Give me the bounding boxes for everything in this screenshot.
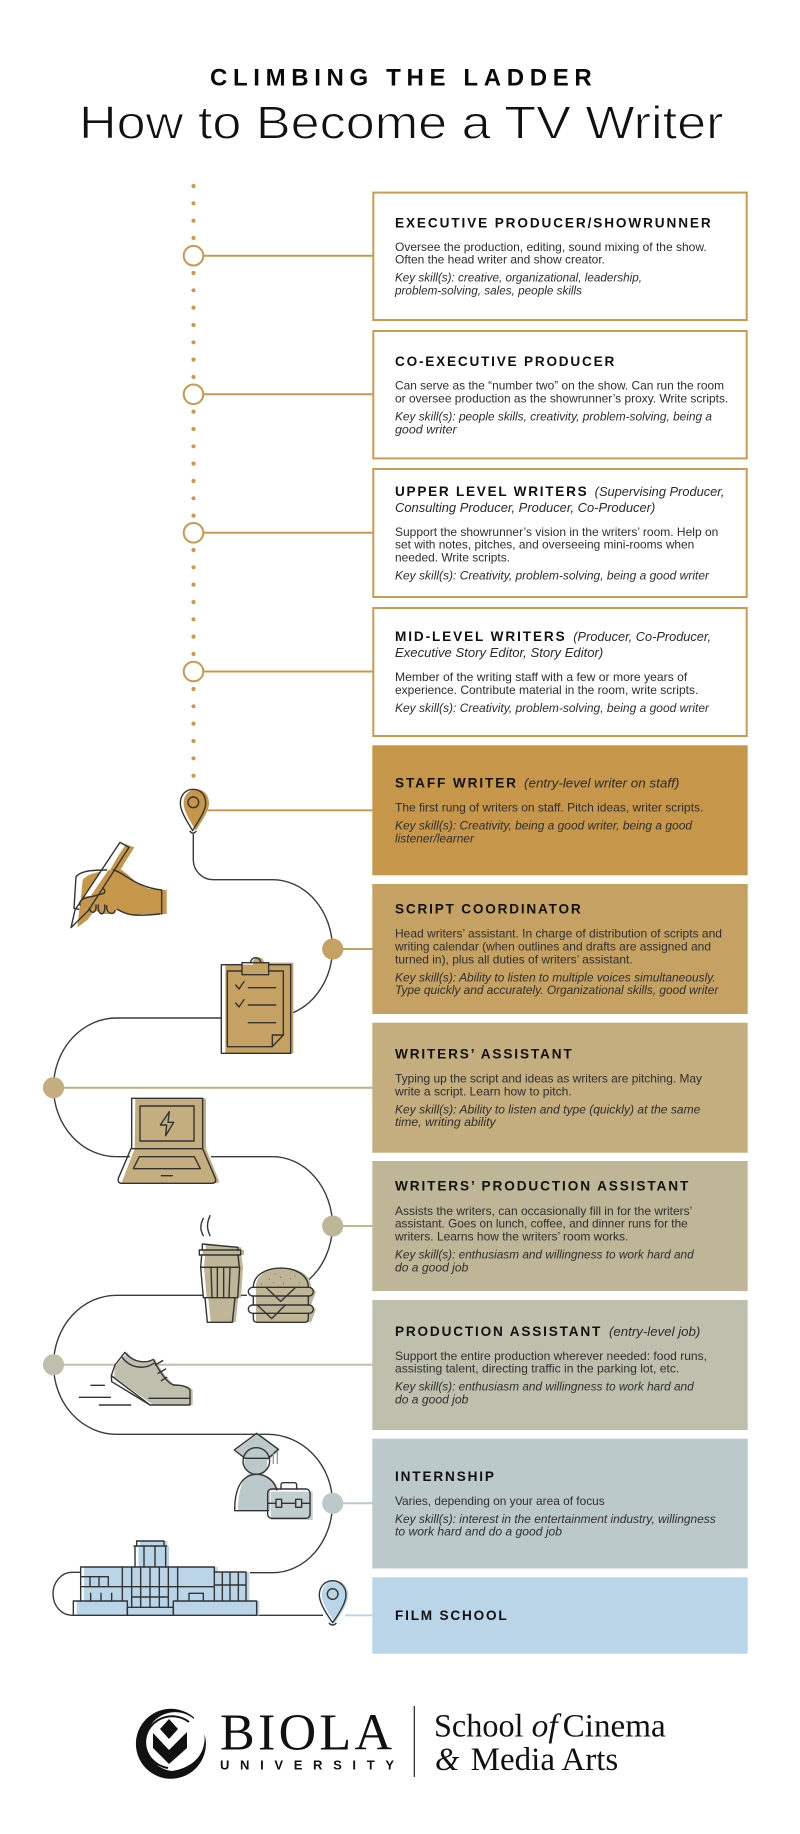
heading: script coordinator: SCRIPT COORDINATOR	[395, 902, 581, 917]
heading: upper level writers	[395, 484, 724, 515]
text: key skills: good writer	[395, 423, 458, 436]
milestone: film school pin	[319, 1581, 372, 1625]
milestone: co-executive producer node	[184, 384, 373, 404]
text: role description: Oversee the production, editing, sound mixing of the show.	[395, 241, 707, 254]
logo: School of Cinema & Media Arts	[434, 1709, 666, 1778]
icon: burger	[248, 1268, 316, 1322]
text: role description: writing calendar (when outlines and drafts are assigned and	[394, 940, 711, 953]
text: role description	[395, 526, 718, 564]
heading: writers' assistant: WRITERS’ ASSISTANT	[395, 1047, 572, 1062]
logo: School of Cinema & Media Arts: School	[434, 1709, 524, 1745]
heading: mid-level writers: (Producer, Co-Producer,	[573, 630, 711, 644]
logo: School of Cinema & Media Arts: Media Arts	[471, 1742, 618, 1778]
panel: writers' production assistant	[372, 1161, 748, 1291]
text: role description: write a script. Learn how to pitch.	[394, 1086, 572, 1099]
text: key skills: Key skill(s): Ability to listen to multiple voices simultaneously.	[395, 971, 716, 984]
text: role description: Member of the writing staff with a few or more years of	[395, 671, 688, 684]
text: key skills	[395, 820, 693, 845]
heading: co-executive producer: CO-EXECUTIVE PRODUCER	[395, 354, 614, 369]
text: role description	[394, 1205, 692, 1243]
icon: coffee cup	[199, 1216, 244, 1322]
text: key skills: Key skill(s): Ability to listen and type (quickly) at the same	[395, 1103, 701, 1116]
text: key skills: Key skill(s): Creativity, being a good writer, being a good	[395, 820, 693, 833]
text: key skills	[395, 1248, 694, 1274]
panel: staff writer	[372, 745, 748, 875]
logo: School of Cinema & Media Arts: Cinema	[563, 1709, 666, 1745]
text: key skills: problem-solving, sales, people skills	[394, 284, 582, 297]
icon: running shoe	[79, 1352, 193, 1405]
text: key skills	[395, 1381, 694, 1407]
heading: mid-level writers	[395, 629, 711, 660]
icon: hand writing	[71, 842, 167, 928]
heading: upper level writers: Consulting Producer, Producer, Co-Producer)	[395, 501, 655, 515]
text: key skills: to work hard and do a good job	[395, 1526, 563, 1539]
milestone: executive producer node	[184, 246, 373, 266]
panel: film school	[372, 1577, 748, 1654]
text: role description: Assists the writers, can occasionally fill in for the writers’	[395, 1205, 692, 1218]
panel: script coordinator	[372, 884, 748, 1014]
text: role description: Head writers’ assistant. In charge of distribution of scripts and	[395, 928, 722, 941]
logo: Biola emblem	[136, 1709, 206, 1779]
heading: upper level writers: UPPER LEVEL WRITERS	[395, 484, 587, 499]
text: key skills: Key skill(s): people skills, creativity, problem-solving, being a	[395, 410, 713, 423]
text: key skills: Type quickly and accurately. Organizational skills, good writer	[395, 984, 719, 997]
heading: production assistant: (entry-level job)	[609, 1325, 700, 1339]
text: role description: set with notes, pitches, and overseeing mini-rooms when	[395, 539, 694, 552]
text: key skills: time, writing ability	[395, 1116, 497, 1129]
text: key skills	[395, 1513, 716, 1539]
text: role description: or oversee production as the showrunner’s proxy. Write scripts.	[395, 392, 728, 405]
text: key skills: Key skill(s): enthusiasm and willingness to work hard and	[395, 1381, 694, 1394]
heading: writers' production assistant: WRITERS’ PRODUCTION ASSISTANT	[395, 1179, 689, 1194]
text: role description: writers. Learns how the writers’ room works.	[394, 1230, 628, 1243]
text: role description: needed. Write scripts.	[395, 551, 510, 564]
text: role description: Varies, depending on your area of focus	[395, 1495, 605, 1508]
heading: production assistant	[395, 1324, 700, 1339]
text: role description: Support the entire production wherever needed: food runs,	[395, 1350, 707, 1363]
logo: School of Cinema & Media Arts: of	[532, 1709, 562, 1745]
heading: production assistant: PRODUCTION ASSISTANT	[395, 1324, 601, 1339]
title: climbing the ladder: CLIMBING THE LADDER	[210, 64, 592, 91]
heading: mid-level writers: Executive Story Editor, Story Editor)	[395, 646, 603, 660]
text: role description: assisting talent, directing traffic in the parking lot, etc.	[395, 1363, 679, 1376]
logo: School of Cinema & Media Arts: &	[435, 1742, 460, 1778]
text: role description	[395, 1350, 707, 1376]
panel: mid-level writers	[373, 608, 747, 736]
heading: staff writer: (entry-level writer on staff)	[524, 777, 679, 791]
heading: executive producer: EXECUTIVE PRODUCER/SHOWRUNNER	[395, 215, 711, 230]
text: key skills: Key skill(s): Creativity, problem-solving, being a good writer	[395, 702, 710, 715]
icon: graduate with briefcase	[234, 1433, 313, 1520]
text: key skills: Key skill(s): creative, organizational, leadership,	[395, 272, 642, 285]
text: role description	[394, 1073, 702, 1099]
text: key skills: Key skill(s): interest in the entertainment industry, willingness	[395, 1513, 716, 1526]
milestone: mid-level writers node	[184, 662, 373, 681]
text: role description: Often the head writer and show creator.	[395, 254, 605, 267]
icon: film school building	[73, 1541, 259, 1615]
logo: Biola University wordmark: BIOLA	[220, 1704, 392, 1761]
panel: internship	[372, 1439, 748, 1568]
text: role description: assistant. Goes on lunch, coffee, and dinner runs for the	[395, 1218, 688, 1231]
winding career path	[53, 834, 333, 1615]
heading: film school: FILM SCHOOL	[395, 1608, 507, 1623]
text: key skills: Key skill(s): Creativity, problem-solving, being a good writer	[395, 569, 710, 582]
panel: upper level writers	[373, 469, 747, 597]
text: key skills	[395, 410, 713, 436]
heading: staff writer: STAFF WRITER	[395, 776, 516, 791]
milestone: upper level writers node	[184, 523, 373, 543]
milestone: internship node	[322, 1493, 373, 1514]
icon: clipboard	[221, 957, 293, 1053]
text: role description: Support the showrunner’s vision in the writers’ room. Help on	[395, 526, 718, 539]
text: key skills	[395, 1103, 701, 1129]
heading: upper level writers: (Supervising Producer,	[595, 485, 724, 499]
logo: Biola University wordmark: UNIVERSITY	[220, 1757, 394, 1772]
text: role description: Can serve as the “number two” on the show. Can run the room	[395, 379, 724, 392]
text: role description	[395, 379, 728, 405]
heading: internship: INTERNSHIP	[395, 1469, 494, 1484]
title: how to become a TV writer: How to Become a TV Writer	[79, 97, 724, 149]
milestone: writers' production assistant node	[322, 1215, 373, 1237]
text: key skills	[394, 272, 642, 297]
text: role description	[395, 241, 707, 267]
panel: writers' assistant	[372, 1023, 748, 1153]
dotted ladder line	[191, 184, 196, 778]
text: key skills: Key skill(s): enthusiasm and willingness to work hard and	[395, 1248, 694, 1261]
heading: mid-level writers: MID-LEVEL WRITERS	[395, 629, 565, 644]
milestone: staff writer pin	[180, 789, 372, 833]
text: role description: The first rung of writers on staff. Pitch ideas, writer scripts.	[395, 802, 703, 815]
text: role description: turned in), plus all duties of writers’ assistant.	[395, 953, 633, 966]
panel: executive producer / showrunner	[373, 193, 747, 320]
heading: staff writer	[395, 776, 679, 791]
panel: production assistant	[372, 1300, 748, 1430]
text: role description	[395, 671, 698, 697]
text: role description	[394, 928, 722, 966]
panel: co-executive producer	[373, 331, 747, 458]
text: key skills	[395, 971, 719, 997]
text: role description: experience. Contribute material in the room, write scripts.	[395, 684, 698, 697]
milestone: production assistant node	[43, 1354, 373, 1375]
milestone: writers' assistant node	[43, 1077, 373, 1098]
logo: divider	[413, 1706, 415, 1777]
text: role description: Typing up the script and ideas as writers are pitching. May	[395, 1073, 702, 1086]
text: key skills: do a good job	[395, 1394, 469, 1407]
text: key skills: do a good job	[395, 1261, 469, 1274]
milestone: script coordinator node	[322, 938, 373, 960]
icon: laptop	[118, 1098, 219, 1183]
text: key skills: listener/learner	[395, 832, 475, 845]
